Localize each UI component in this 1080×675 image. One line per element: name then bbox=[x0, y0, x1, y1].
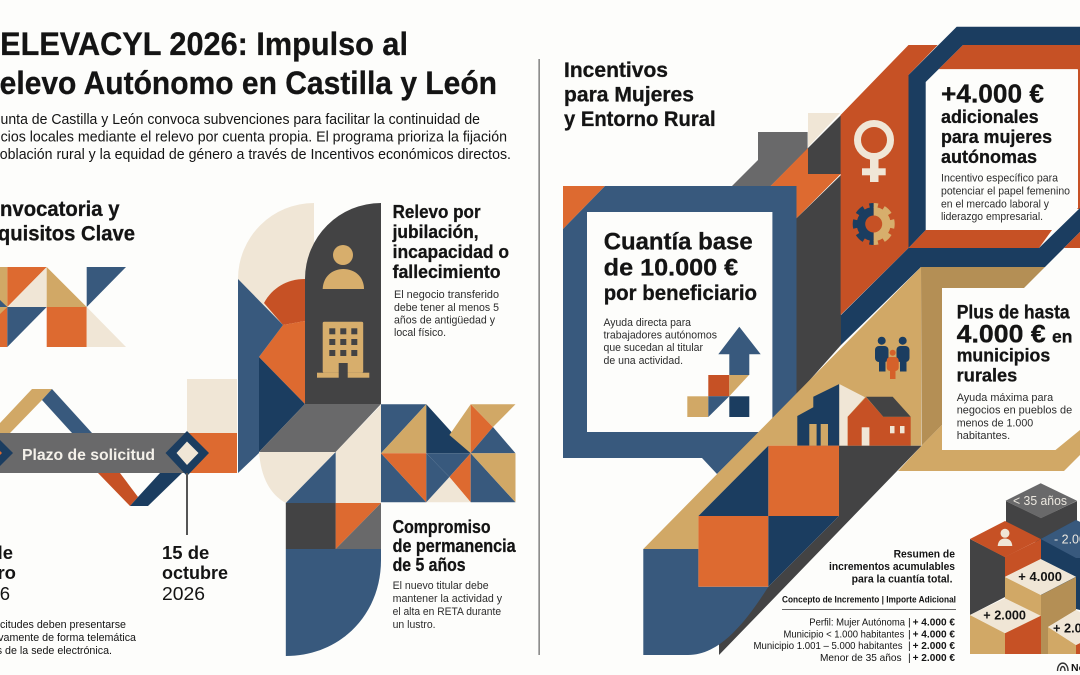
text: plus de hasta: habitantes. bbox=[957, 430, 1010, 442]
text: plus de hasta: 4.000 € bbox=[957, 320, 1046, 348]
table: increments: Municipio < 1.000 habitantes bbox=[784, 628, 904, 640]
center divider bbox=[539, 59, 540, 655]
text: +4.000 €: autónomas bbox=[941, 147, 1037, 167]
date: end: octubre bbox=[162, 562, 228, 583]
icon: building bbox=[317, 322, 369, 378]
table: increments: + 4.000 € bbox=[913, 628, 955, 640]
text: plus de hasta: negocios en pueblos de bbox=[957, 405, 1072, 417]
isometric stacked blocks bbox=[970, 483, 1080, 654]
text: cuantía base: que sucedan al titular bbox=[604, 342, 703, 354]
table: increments: | bbox=[908, 640, 911, 652]
date: end bbox=[162, 542, 228, 604]
text: cuantía base bbox=[604, 228, 757, 367]
note: solicitudes bbox=[0, 619, 136, 657]
central mosaic bbox=[238, 203, 381, 656]
text: relevo por jubilación: debe tener al menos 5 bbox=[394, 302, 499, 314]
text: relevo por jubilación: años de antigüedad y bbox=[394, 314, 495, 326]
icon: houses bbox=[797, 384, 911, 446]
icon: person bbox=[323, 245, 364, 289]
icon: person on block bbox=[998, 529, 1012, 546]
heading: incentivos: para Mujeres bbox=[564, 82, 694, 106]
text: compromiso de permanencia: el alta en RETA durante bbox=[393, 606, 501, 618]
text: cuantía base: Cuantía base bbox=[604, 228, 753, 255]
text: cuantía base: trabajadores autónomos bbox=[604, 329, 717, 341]
table: increments: + 2.000 € bbox=[913, 640, 955, 652]
heading: convocatoria bbox=[0, 197, 135, 246]
table: increments: | bbox=[908, 617, 911, 629]
text: compromiso de permanencia: Compromiso bbox=[393, 517, 491, 537]
text: plus de hasta: municipios bbox=[957, 346, 1050, 366]
text: relevo por jubilación: Relevo por bbox=[393, 202, 481, 222]
text: +4.000 €: liderazgo empresarial. bbox=[941, 211, 1043, 223]
text: +4.000 €: potenciar el papel femenino bbox=[941, 185, 1070, 197]
timeline connector bbox=[186, 473, 188, 535]
text: plus de hasta bbox=[957, 302, 1072, 442]
table: increments: | bbox=[908, 652, 911, 664]
text: compromiso de permanencia: un lustro. bbox=[393, 619, 436, 631]
intro text bbox=[0, 112, 511, 163]
timeline ribbon zigzag bbox=[0, 379, 237, 506]
text: relevo por jubilación: incapacidad o bbox=[393, 242, 509, 262]
background blocks behind cards bbox=[732, 45, 938, 395]
triangle patchwork bbox=[381, 404, 516, 502]
text: cuantía base: Ayuda directa para bbox=[604, 317, 692, 329]
table: increments bbox=[754, 595, 956, 664]
panel: cuantía base bbox=[563, 186, 796, 474]
table: increments: Menor de 35 años bbox=[820, 652, 902, 664]
text: compromiso de permanencia: El nuevo titular debe bbox=[393, 580, 489, 592]
summary heading: Resumen de bbox=[894, 549, 955, 561]
text: relevo por jubilación: fallecimiento bbox=[393, 262, 501, 282]
text: cuantía base: de una actividad. bbox=[604, 355, 683, 367]
block labels: + 2.000 bbox=[983, 608, 1026, 622]
geometric pattern: top left bbox=[0, 267, 126, 347]
text: +4.000 €: en el mercado laboral y bbox=[941, 198, 1049, 210]
table: increments: + 4.000 € bbox=[913, 617, 955, 629]
table: increments: Municipio 1.001 – 5.000 habitantes bbox=[754, 640, 902, 652]
text: compromiso de permanencia: mantener la actividad y bbox=[393, 593, 503, 605]
text: plus de hasta: rurales bbox=[957, 366, 1017, 386]
heading: incentivos bbox=[564, 58, 716, 131]
table: increments: Perfil: Mujer Autónoma bbox=[809, 617, 905, 629]
text: compromiso de permanencia bbox=[393, 517, 516, 631]
text: cuantía base: por beneficiario bbox=[604, 281, 757, 305]
icon: female symbol bbox=[858, 124, 890, 182]
table: increments: + 2.000 € bbox=[913, 652, 955, 664]
text: +4.000 € bbox=[941, 79, 1070, 223]
text: compromiso de permanencia: de permanencia bbox=[393, 536, 516, 556]
date: start bbox=[0, 542, 16, 604]
panel: municipios rurales bbox=[643, 267, 1080, 549]
panel: mujeres autónomas bbox=[841, 27, 1080, 345]
text: plus de hasta: Ayuda máxima para bbox=[957, 392, 1054, 404]
text: plus de hasta: en bbox=[1052, 326, 1072, 346]
timeline band: plazo de solicitud bbox=[0, 431, 209, 476]
text: +4.000 €: Incentivo específico para bbox=[941, 173, 1059, 185]
date: end: 15 de bbox=[162, 542, 209, 563]
text: +4.000 €: adicionales bbox=[941, 107, 1039, 127]
logo bbox=[1058, 662, 1080, 674]
summary heading: para la cuantía total. bbox=[852, 573, 952, 585]
table: increments: | bbox=[908, 628, 911, 640]
checker block bbox=[643, 446, 922, 655]
text: cuantía base: de 10.000 € bbox=[604, 254, 738, 281]
text: compromiso de permanencia: de 5 años bbox=[393, 555, 466, 575]
block labels: + 4.000 bbox=[1018, 570, 1062, 584]
heading: incentivos: y Entorno Rural bbox=[564, 107, 716, 131]
icon: growth arrow bbox=[687, 327, 761, 417]
heading: incentivos: Incentivos bbox=[564, 58, 668, 82]
text: plus de hasta: Plus de hasta bbox=[957, 302, 1070, 323]
block labels: < 35 años bbox=[1013, 494, 1067, 508]
icon: gear bbox=[855, 206, 892, 242]
text: relevo por jubilación: El negocio transferido bbox=[394, 289, 499, 301]
date: end: 2026 bbox=[162, 583, 205, 604]
timeline band: plazo de solicitud: Plazo de solicitud bbox=[22, 447, 155, 464]
icon: family bbox=[875, 337, 910, 379]
block labels bbox=[983, 494, 1080, 635]
text: +4.000 €: para mujeres bbox=[941, 127, 1052, 147]
text: relevo por jubilación bbox=[392, 202, 509, 339]
text: +4.000 €: +4.000 € bbox=[941, 79, 1044, 109]
table: increments: Concepto de Incremento | Importe Adicional bbox=[782, 595, 956, 606]
summary heading: incrementos acumulables bbox=[829, 561, 955, 573]
text: relevo por jubilación: local físico. bbox=[394, 327, 446, 339]
text: plus de hasta: menos de 1.000 bbox=[957, 417, 1033, 429]
text: relevo por jubilación: jubilación, bbox=[392, 222, 479, 242]
summary heading bbox=[829, 549, 955, 585]
title bbox=[0, 26, 497, 101]
